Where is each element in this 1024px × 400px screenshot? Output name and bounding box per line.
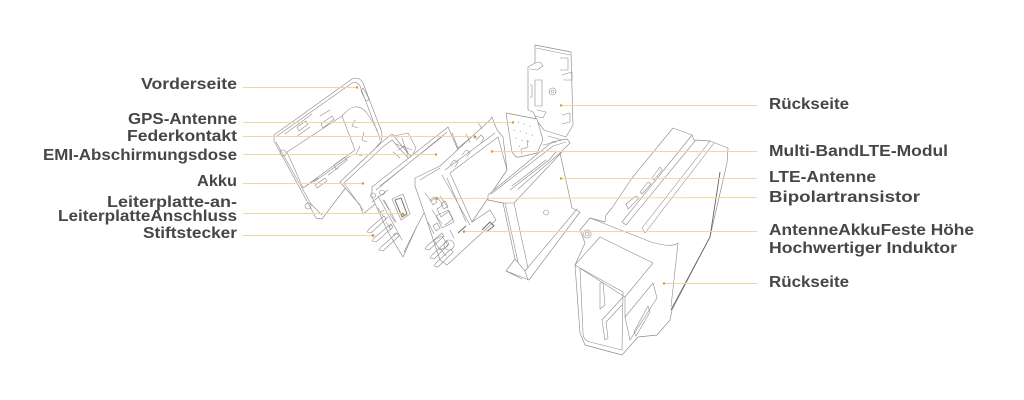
part: circuit board with screen bbox=[415, 117, 507, 267]
board pin rods bbox=[425, 233, 453, 267]
part: LTE antenna bracket bbox=[488, 136, 580, 280]
label: Vorderseite: Vorderseite bbox=[141, 76, 237, 93]
leader line: Stiftstecker bbox=[243, 234, 374, 237]
leader line: Rückseite bottom bbox=[663, 282, 757, 285]
leader line: Multi-BandLTE-Modul bbox=[491, 150, 757, 153]
label: Federkontakt: Federkontakt bbox=[127, 128, 238, 145]
label: Leiterplatte-an-: Leiterplatte-an- bbox=[107, 194, 237, 211]
label: Hochwertiger Induktor: Hochwertiger Induktor bbox=[769, 240, 957, 257]
label: Rückseite bottom: Rückseite bbox=[769, 274, 849, 291]
label: GPS-Antenne: GPS-Antenne bbox=[128, 111, 237, 128]
leader line: Akku bbox=[243, 182, 364, 185]
leader line: LTE-Antenne bbox=[560, 177, 757, 180]
label: EMI-Abschirmungsdose: EMI-Abschirmungsdose bbox=[43, 147, 237, 164]
label: Bipolartransistor: Bipolartransistor bbox=[769, 189, 920, 206]
label: Stiftstecker: Stiftstecker bbox=[143, 225, 237, 242]
part: back plate bbox=[528, 45, 573, 137]
housing connector block bbox=[575, 237, 657, 350]
label: Multi-BandLTE-Modul: Multi-BandLTE-Modul bbox=[769, 143, 948, 160]
leader line: EMI-Abschirmungsdose bbox=[243, 153, 437, 156]
leader line: GPS-Antenne bbox=[243, 121, 514, 124]
leader line: Antenne Akku bbox=[463, 230, 757, 233]
leader line: Rückseite top bbox=[560, 104, 757, 107]
part: battery bbox=[340, 133, 430, 214]
label: LeiterplatteAnschluss: LeiterplatteAnschluss bbox=[58, 208, 237, 225]
pin header rods bbox=[367, 216, 399, 251]
leader line: Federkontakt bbox=[243, 136, 476, 138]
part: EMI shielding can and board with connector bbox=[367, 127, 458, 257]
part: LTE module PCB bbox=[506, 113, 543, 157]
label: Akku: Akku bbox=[197, 173, 237, 190]
part: front frame bbox=[274, 78, 382, 219]
label: Rückseite top: Rückseite bbox=[769, 96, 849, 113]
leader line: Vorderseite bbox=[243, 86, 358, 89]
label: AntenneAkkuFeste Höhe: AntenneAkkuFeste Höhe bbox=[769, 222, 974, 239]
exploded device drawing bbox=[274, 45, 728, 355]
leader line: Leiterplattenanschluss bbox=[243, 213, 404, 215]
label: LTE-Antenne: LTE-Antenne bbox=[769, 169, 876, 186]
leader line: Bipolartransistor bbox=[436, 197, 757, 200]
part: rear housing bbox=[575, 128, 728, 355]
